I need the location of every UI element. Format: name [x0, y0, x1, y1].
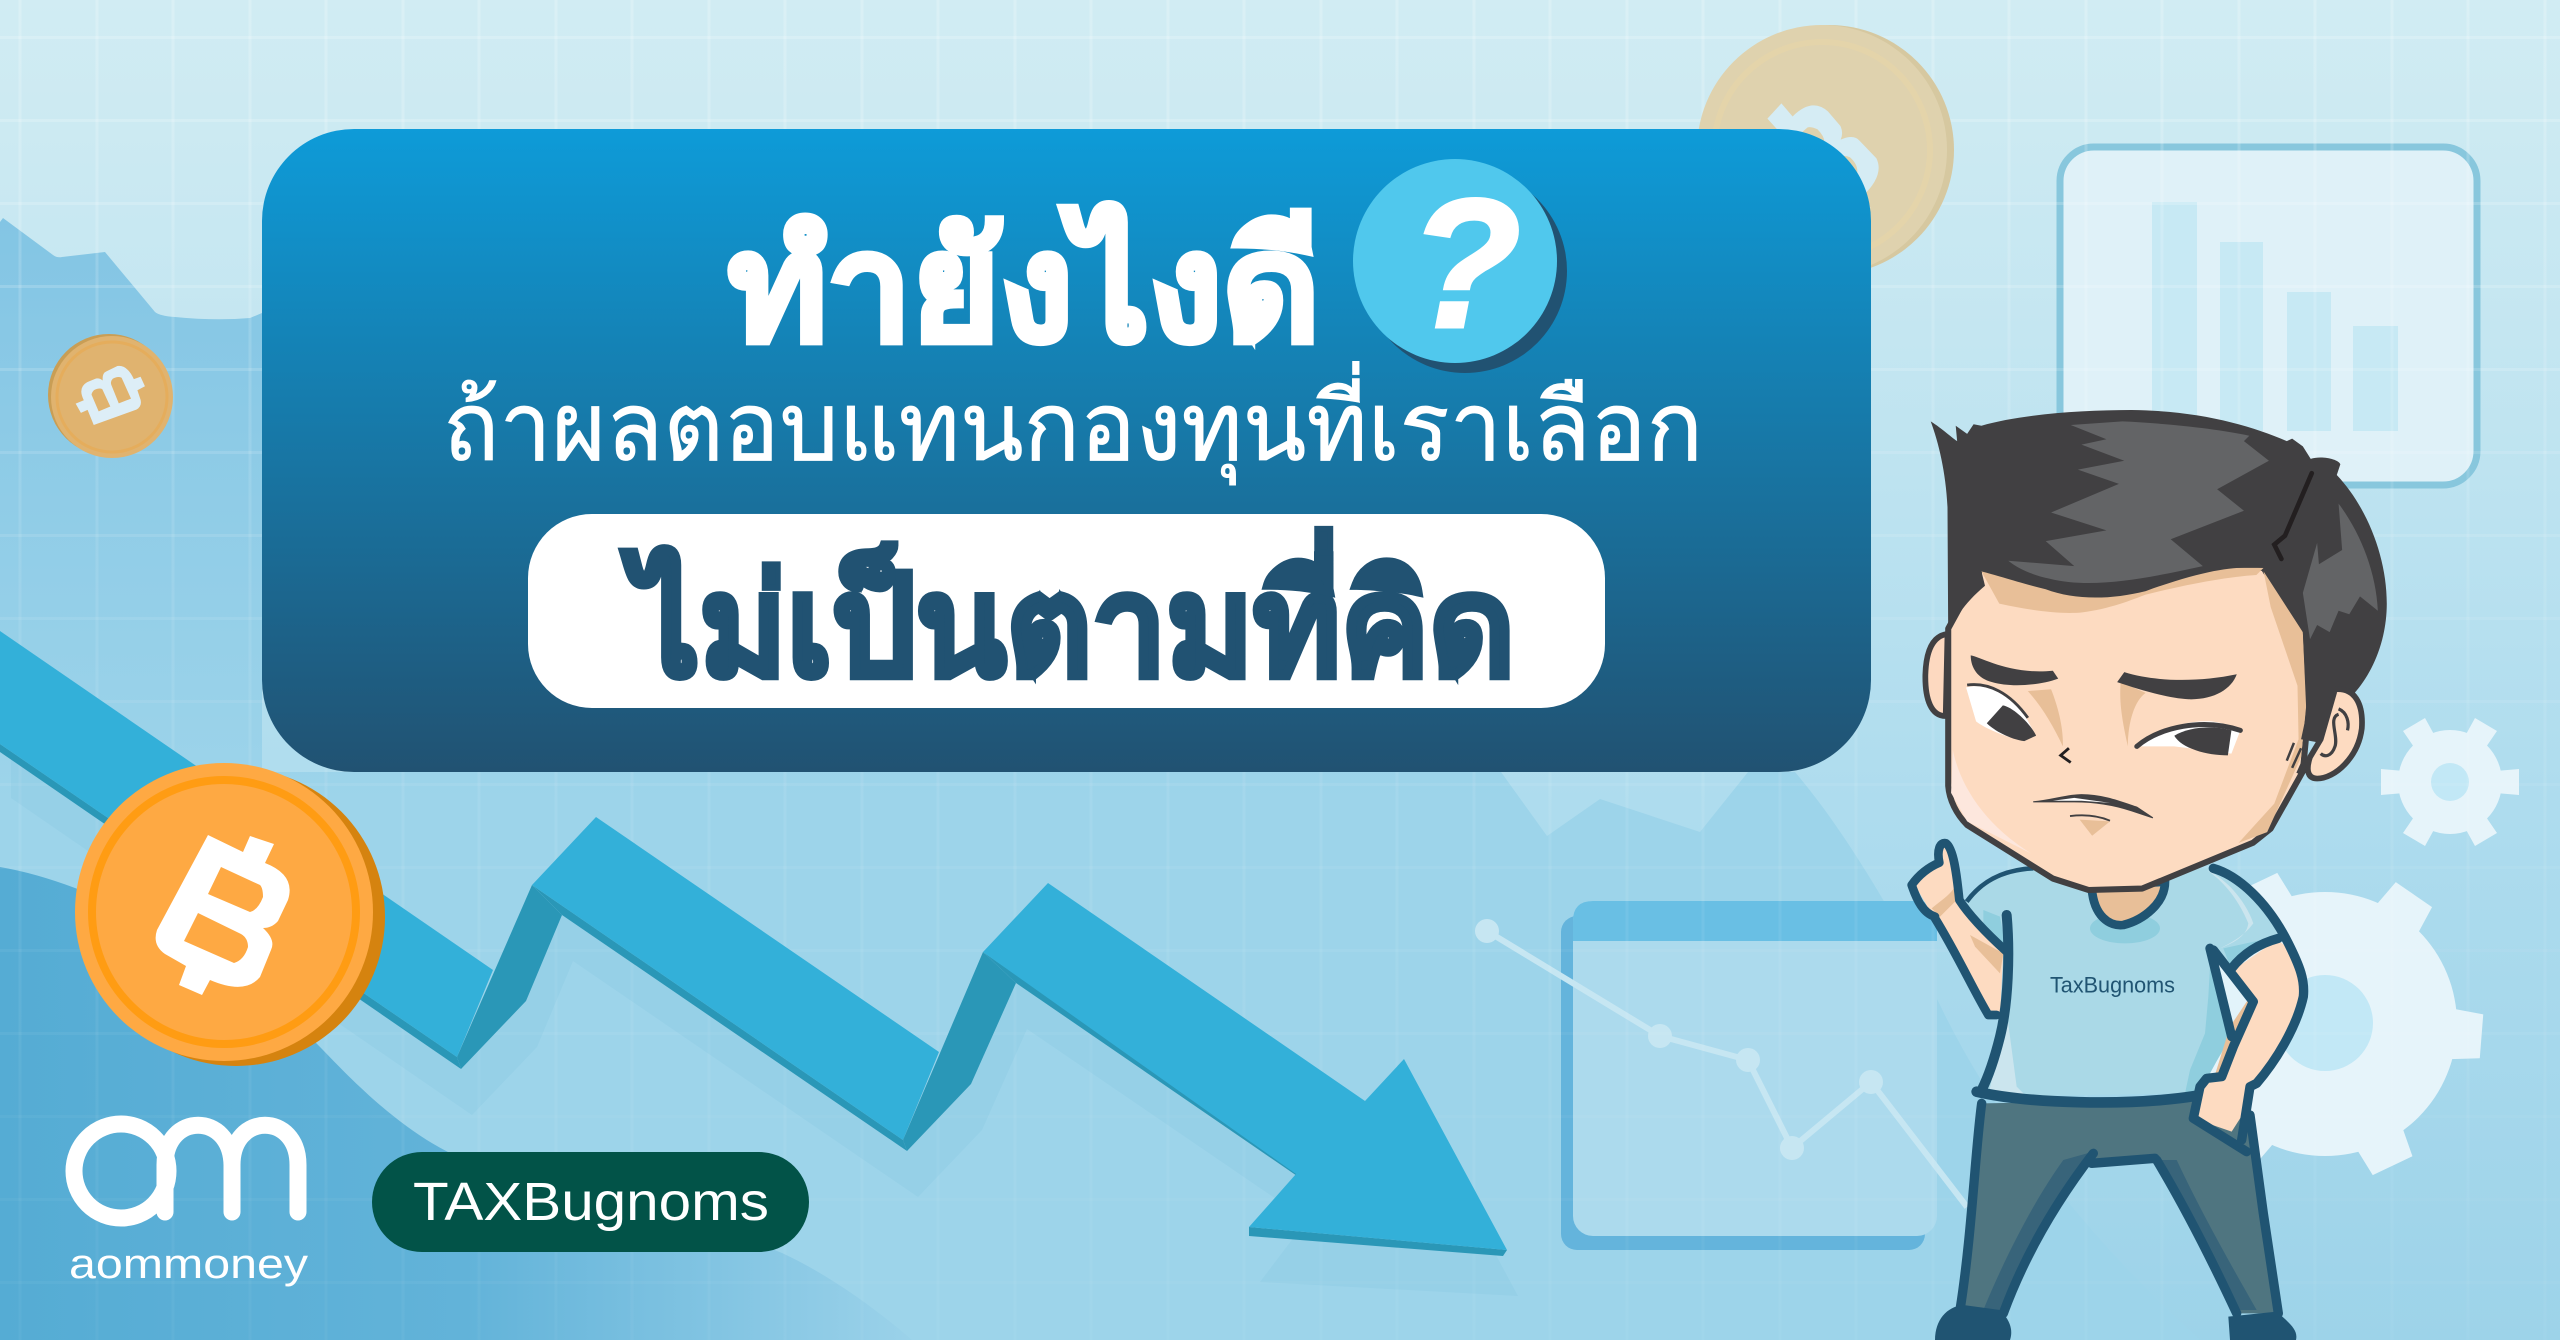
left arm thumbs up [1912, 843, 2195, 1102]
question badge [1353, 159, 1567, 373]
hair highlight side [2303, 504, 2378, 639]
line chart falling [1475, 919, 1967, 1207]
trousers [1935, 1100, 2296, 1340]
right ear [2287, 689, 2362, 779]
logo: aommoney: aommoney [69, 1240, 308, 1287]
hair streak [2274, 473, 2312, 559]
gear: small [2381, 718, 2519, 846]
character [1912, 410, 2387, 1340]
t-shirt: TaxBugnoms [2050, 973, 2175, 998]
character body [1912, 843, 2304, 1340]
highlight pill: ไม่เป็นตามที่คิด [621, 528, 1515, 705]
left eye [1966, 685, 2036, 741]
gear: large [2166, 871, 2484, 1177]
neck [2092, 882, 2165, 925]
window chart card [1561, 901, 1937, 1250]
small faded coin left [48, 334, 173, 458]
mouth [2033, 795, 2153, 821]
falling arrow [0, 631, 1507, 1256]
logo: aommoney [69, 1124, 308, 1287]
bar chart card [2060, 147, 2477, 485]
front hill [0, 867, 912, 1340]
character head [1925, 410, 2387, 890]
faded coin top [1697, 25, 1954, 275]
left ear [1925, 634, 1947, 716]
badge: TAXBugnoms [372, 1152, 809, 1252]
right arm in pocket [2193, 868, 2304, 1152]
arrow shadow [11, 677, 1518, 1296]
face shading [1951, 568, 2306, 854]
t-shirt [1963, 868, 2280, 1097]
question badge: ? [1409, 160, 1521, 366]
hair [1931, 410, 2387, 743]
title line one: ทำยังไงดี [728, 203, 1320, 372]
badge: TAXBugnoms: TAXBugnoms [413, 1172, 769, 1232]
nose [2061, 748, 2071, 762]
right eye [2137, 721, 2240, 755]
main title panel [262, 129, 1871, 772]
hair highlight front [2008, 421, 2269, 583]
back mountain silhouette [0, 218, 2200, 1340]
eyebrows [1971, 655, 2237, 699]
subtitle line: ถ้าผลตอบแทนกองทุนที่เราเลือก [443, 361, 1703, 486]
face [1948, 568, 2308, 890]
main orange coin [75, 763, 385, 1066]
